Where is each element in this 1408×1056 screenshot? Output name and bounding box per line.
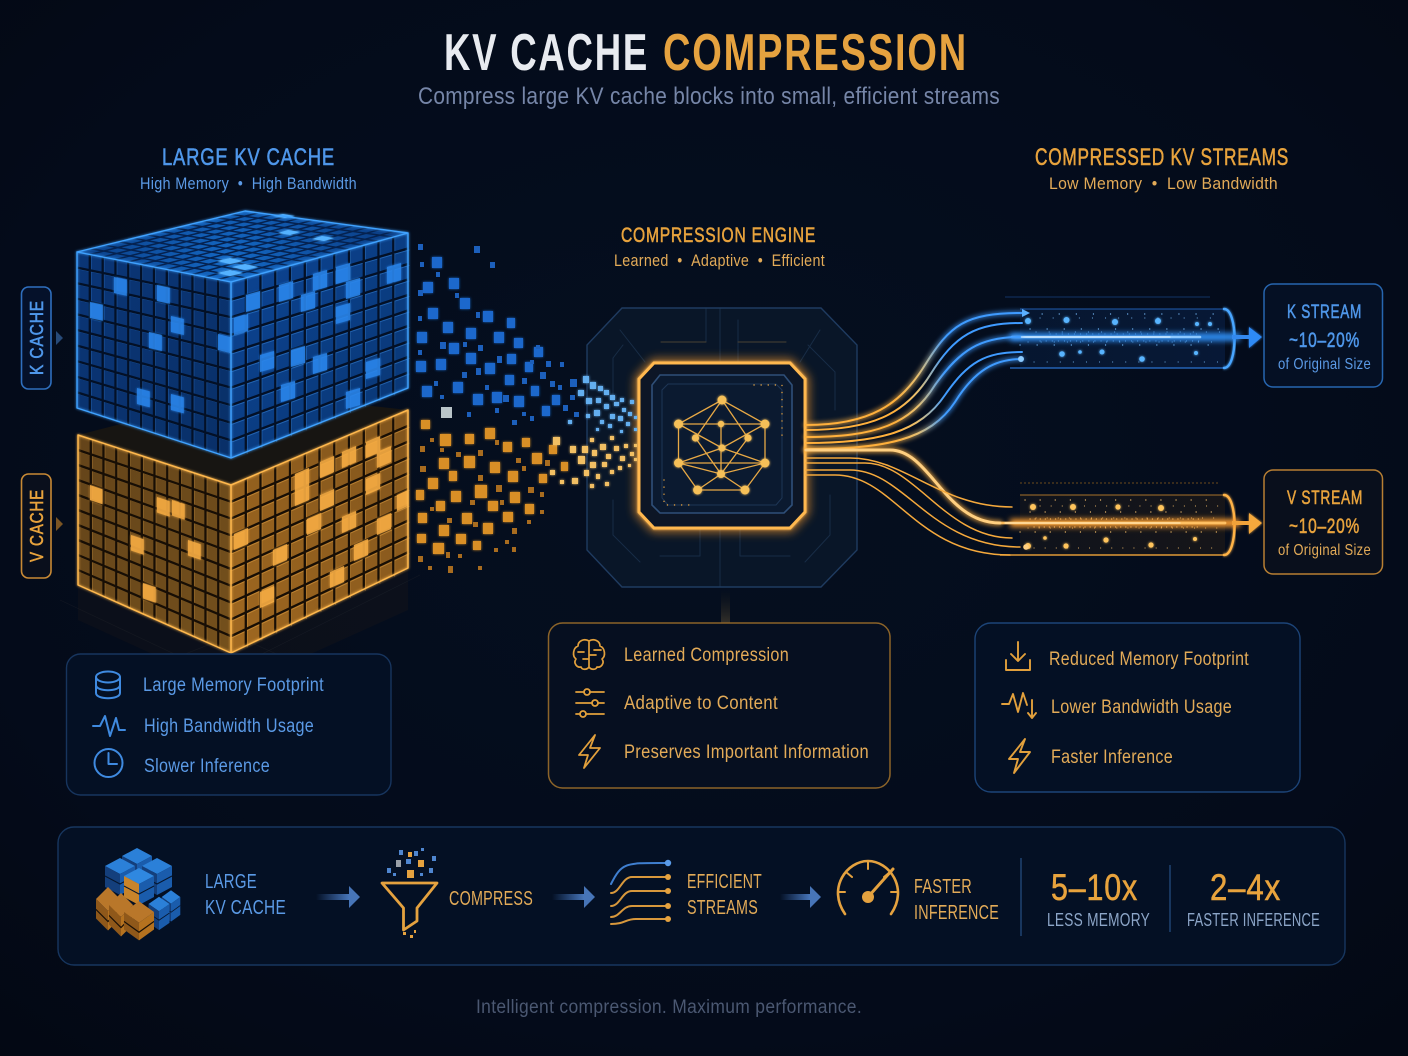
arrow: [780, 886, 821, 908]
panel: engine properties: [548, 623, 890, 788]
metric: faster inference: [1187, 867, 1320, 930]
arrow: [1232, 335, 1250, 339]
icon: bolt: [1009, 739, 1030, 773]
orange V cache cube: [78, 392, 409, 653]
metric: less memory: [1047, 867, 1150, 930]
glowing blue edges: [77, 211, 408, 458]
circuit traces: [613, 308, 835, 587]
compression engine: [587, 308, 857, 587]
label: V cache: V CACHE: [27, 489, 47, 562]
arrow: [552, 886, 595, 908]
title: KV CACHE: [444, 24, 649, 82]
blue K cache cube: [77, 211, 409, 458]
icon: streams: [611, 860, 671, 924]
K stream box: [1264, 284, 1382, 387]
metric: faster inference: FASTER INFERENCE: [1187, 910, 1320, 930]
flows to V stream: [806, 450, 1029, 555]
V stream box: V STREAM: [1287, 488, 1363, 509]
icon: pulse: [93, 716, 125, 736]
glowing orange cells: [90, 436, 408, 608]
icon: clock: [94, 749, 122, 777]
icon: funnel with particles: [382, 848, 437, 938]
text: faster inference: INFERENCE: [914, 902, 999, 924]
blue data particles: [416, 244, 637, 433]
title: COMPRESSION: [663, 24, 968, 82]
heading: large KV cache: High Memory • High Bandwidth: [140, 174, 357, 193]
footer tagline: Intelligent compression. Maximum performance.: [476, 997, 862, 1018]
text: compress: COMPRESS: [449, 888, 533, 910]
V stream box: of Original Size: [1278, 542, 1371, 559]
title: [444, 24, 968, 82]
text: faster inference: FASTER: [914, 876, 972, 898]
metric: faster inference: 2–4x: [1210, 867, 1281, 908]
text: large KV cache: LARGE: [205, 871, 257, 893]
heading: compressed KV streams: Low Memory • Low Bandwidth: [1049, 174, 1278, 193]
heading: compressed KV streams: COMPRESSED KV STREAMS: [1035, 144, 1289, 171]
icon: download tray: [1006, 642, 1030, 670]
subtitle: Compress large KV cache blocks into small, efficient streams: [418, 83, 1000, 110]
glowing orange edges: [78, 410, 408, 653]
icon: database: [96, 672, 120, 698]
panel: engine properties: Learned Compression: [624, 645, 789, 666]
specks: [1020, 500, 1222, 548]
panel: engine properties: Adaptive to Content: [624, 693, 778, 714]
icon: cube stack: [96, 848, 180, 940]
text: efficient streams: STREAMS: [687, 897, 758, 919]
central beam: [1010, 333, 1240, 341]
icon: pulse down: [1002, 693, 1036, 718]
panel: large cache drawbacks: Large Memory Footprint: [143, 675, 324, 696]
neural network icon: [674, 396, 770, 494]
engine outer housing: [587, 308, 857, 587]
label: K cache: K CACHE: [27, 300, 47, 375]
arrow: [1232, 521, 1250, 525]
metric: less memory: LESS MEMORY: [1047, 910, 1150, 930]
text: efficient streams: [687, 871, 762, 919]
icon: sliders: [576, 689, 604, 717]
label: K cache: [22, 287, 63, 389]
label: V cache: [22, 474, 63, 578]
panel: compressed benefits: [975, 623, 1300, 792]
K stream box: K STREAM: [1287, 302, 1362, 323]
text: efficient streams: EFFICIENT: [687, 871, 762, 893]
glowing top cells: [217, 214, 334, 276]
inner core: [652, 375, 792, 513]
central beam: [1010, 519, 1240, 527]
tube mouth: [1224, 309, 1234, 368]
glowing gold frame: [639, 363, 805, 528]
panel: engine properties: Preserves Important Information: [624, 742, 869, 763]
flows to K stream: [806, 309, 1030, 449]
metric: less memory: 5–10x: [1051, 867, 1138, 908]
text: large KV cache: [205, 871, 286, 919]
panel: pipeline summary: [58, 827, 1345, 965]
icon: brain: [574, 640, 604, 669]
panel: large cache drawbacks: High Bandwidth Usage: [144, 716, 314, 737]
floor reflection: [60, 568, 420, 690]
specks: [1020, 314, 1222, 362]
V stream box: ~10–20%: [1289, 515, 1360, 538]
panel: large cache drawbacks: [66, 654, 391, 795]
icon: bolt: [579, 735, 600, 768]
orange data particles: [416, 420, 637, 573]
engine connector: [721, 590, 730, 623]
arrow: [316, 886, 360, 908]
panel: large cache drawbacks: Slower Inference: [144, 756, 270, 777]
heading: compression engine: Learned • Adaptive • Efficient: [614, 251, 825, 270]
text: large KV cache: KV CACHE: [205, 897, 286, 919]
heading: compression engine: [614, 224, 825, 270]
tube mouth: [1224, 495, 1234, 555]
K stream box: of Original Size: [1278, 356, 1371, 373]
heading: compression engine: COMPRESSION ENGINE: [621, 224, 816, 247]
heading: compressed KV streams: [1035, 144, 1289, 193]
text: faster inference: [914, 876, 999, 924]
icon: gauge: [838, 861, 898, 914]
V stream tube: [1000, 483, 1262, 555]
panel: compressed benefits: Faster Inference: [1051, 747, 1173, 768]
panel: compressed benefits: Lower Bandwidth Usage: [1051, 697, 1232, 718]
K stream box: ~10–20%: [1289, 329, 1360, 352]
K stream tube: [1005, 297, 1262, 368]
V stream box: [1264, 470, 1382, 574]
panel: compressed benefits: Reduced Memory Footprint: [1049, 649, 1249, 670]
glowing blue cells: [90, 263, 401, 413]
heading: large KV cache: [140, 144, 357, 193]
heading: large KV cache: LARGE KV CACHE: [162, 144, 335, 171]
